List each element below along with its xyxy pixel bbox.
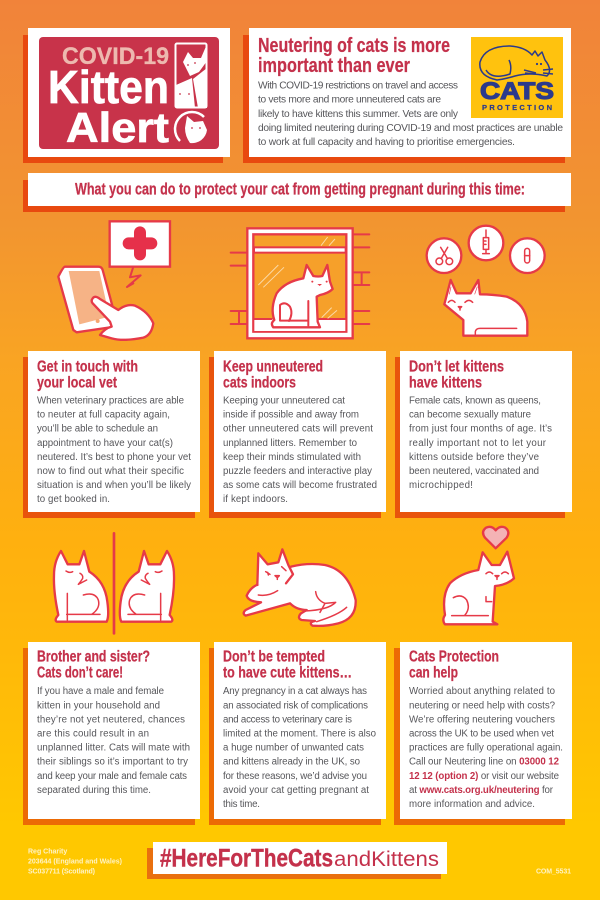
body text	[223, 686, 376, 810]
icon: heart	[483, 527, 508, 548]
body text	[37, 686, 190, 796]
logo text: Alert: Alert	[66, 104, 169, 151]
text block: intro: to vets more and more unneutered cats are	[258, 95, 441, 106]
heading: Keep unneutered	[223, 358, 323, 376]
banner: what you can do	[23, 173, 571, 212]
text block: intro	[258, 80, 563, 148]
body text: practices are fully operational again.	[409, 743, 563, 754]
icon: kitten in a circle	[175, 112, 207, 143]
body text: keep their minds stimulated with	[223, 452, 361, 463]
body text: 12 12 (option 2) or visit our website	[409, 771, 559, 782]
illustration: smiling cat	[444, 280, 527, 336]
footer: charity registration: Reg Charity	[28, 848, 67, 855]
heading	[223, 358, 323, 392]
heading: Neutering of cats is more important than ever: Neutering of cats is more	[258, 35, 450, 57]
body text: are this could result in an	[37, 728, 149, 740]
heading: Get in touch with	[37, 358, 138, 376]
heading: cats indoors	[223, 374, 296, 392]
body text: puzzle feeders and interactive play	[223, 466, 372, 477]
logo text: COVID-19: COVID-19	[62, 43, 169, 70]
body text: for these reasons, we’d advise you	[223, 771, 367, 782]
heading: Cats don’t care!	[37, 664, 123, 682]
heading: Brother and sister?	[37, 648, 150, 666]
heading: have kittens	[409, 374, 482, 392]
hashtag bold text: #HereForTheCats	[160, 844, 333, 872]
logo text: PROTECTION: PROTECTION	[482, 103, 552, 112]
heading: Cats Protection	[409, 648, 499, 666]
icon: cat with scissors, syringe and pill	[427, 226, 545, 336]
panel: Neutering intro	[243, 28, 571, 163]
body text: to get booked in.	[37, 494, 110, 505]
panel: Keep unneutered cats indoors	[209, 351, 386, 518]
body text: now to find out what their specific	[37, 466, 184, 477]
body text: been neutered, vaccinated and	[409, 466, 539, 477]
text block: intro: to work at full capacity and having to prioritise emergencies.	[258, 137, 515, 148]
icon: cat in a window	[231, 228, 369, 338]
body text: as some cats will become frustrated	[223, 480, 377, 491]
body text: Worried about anything related to	[409, 686, 555, 697]
text block: intro: likely to have kittens this summer. Vets are only	[258, 109, 459, 120]
panel: Kitten Alert logo	[23, 28, 230, 163]
body text: Call our Neutering line on 03000 12	[409, 757, 559, 768]
body text: across the UK to be used when vet	[409, 728, 554, 740]
heading: Neutering of cats is more important than ever	[258, 35, 450, 77]
body text: their siblings so it’s important to try	[37, 757, 188, 768]
icon: scissors	[427, 238, 461, 273]
body text: situation is and when you’ll be likely	[37, 480, 191, 491]
body text	[37, 396, 191, 505]
heading	[37, 648, 150, 682]
illustration: cat	[443, 552, 514, 624]
body text: neutering or need help with costs?	[409, 700, 556, 711]
panel: Cats Protection can help	[394, 642, 572, 825]
body text: unplanned litter. Cats will mate with	[37, 743, 190, 754]
icon: lying cat	[244, 549, 356, 626]
body text: and access to veterinary care is	[223, 714, 352, 725]
text block: intro: doing limited neutering during COVID-19 and most practices are unable	[258, 123, 563, 134]
logo text: Kitten: Kitten	[48, 61, 169, 113]
heading: Don’t let kittens	[409, 358, 504, 376]
hashtag banner	[147, 842, 447, 879]
footer: charity registration: 203644 (England and Wales)	[28, 858, 122, 866]
panel: Don't let kittens have kittens	[395, 351, 572, 518]
body text: Any pregnancy in a cat always has	[223, 686, 367, 697]
body text: separated during this time.	[37, 785, 151, 796]
body text: to neuter at full capacity again,	[37, 410, 170, 421]
body text: microchipped!	[409, 480, 473, 491]
body text: you’ll be able to schedule an	[37, 424, 158, 435]
body text: limited at the moment. There is also	[223, 728, 376, 740]
heading: to have cute kittens…	[223, 664, 352, 682]
body text: other unneutered cats will prevent	[223, 424, 373, 435]
body text: unplanned litters. Remember to	[223, 438, 357, 449]
body text: at www.cats.org.uk/neutering for	[409, 785, 554, 796]
heading	[37, 358, 138, 392]
heading	[223, 648, 352, 682]
body text: avoid your cat getting pregnant at	[223, 785, 369, 796]
icon: kittens in a doorway	[176, 44, 207, 108]
body text: Keeping your unneutered cat	[223, 396, 345, 406]
footer: charity registration: SC037711 (Scotland)	[28, 868, 95, 876]
body text: can become sexually mature	[409, 410, 531, 421]
body text: We’re offering neutering vouchers	[409, 714, 555, 725]
heading	[409, 358, 504, 392]
heading	[409, 648, 499, 682]
body text: they’re not yet neutered, chances	[37, 714, 185, 725]
icon: syringe	[469, 226, 503, 260]
icon: brother and sister cats with divider	[54, 533, 174, 633]
illustration: left cat	[54, 551, 108, 622]
body text: and kittens already in the UK, so	[223, 757, 360, 768]
body text: from just four months of age. It’s	[409, 424, 552, 435]
heading: your local vet	[37, 374, 117, 392]
heading: Neutering of cats is more important than ever: important than ever	[258, 55, 410, 77]
body text: When veterinary practices are able	[37, 396, 184, 406]
text block: intro: With COVID-19 restrictions on travel and access	[258, 80, 458, 92]
body text: this time.	[223, 799, 260, 810]
heading: Don’t be tempted	[223, 648, 325, 666]
panel: Get in touch with your local vet	[23, 351, 200, 518]
logo: Cats Protection	[471, 37, 563, 118]
body text: and keep your male and female cats	[37, 771, 187, 782]
body text: if kept indoors.	[223, 494, 288, 505]
icon: happy cat with heart	[443, 527, 514, 624]
panel: Don't be tempted to have cute kittens	[209, 642, 386, 825]
body text: inside if possible and away from	[223, 410, 359, 421]
body text	[409, 396, 552, 491]
icon: pill	[510, 238, 545, 273]
body text: kitten in your household and	[37, 700, 160, 711]
hashtag handwritten text: andKittens	[334, 848, 439, 871]
logo text: CATS: CATS	[480, 78, 554, 105]
icon: phone and vet message	[58, 221, 170, 340]
body text: an associated risk of complications	[223, 700, 368, 711]
body text: a huge number of unwanted cats	[223, 743, 364, 754]
illustration: right cat	[120, 551, 174, 622]
body text: neutered. It’s best to phone your vet	[37, 452, 191, 463]
body text	[409, 686, 563, 810]
body text: appointment to have your cat(s)	[37, 438, 173, 449]
panel: Brother and sister? Cats don't care!	[23, 642, 200, 825]
body text: Female cats, known as queens,	[409, 396, 541, 406]
footer: charity registration	[28, 848, 122, 876]
body text	[223, 396, 377, 505]
footer: campaign code: COM_5531	[536, 868, 571, 876]
heading: can help	[409, 664, 458, 682]
body text: really important not to let your	[409, 438, 547, 449]
body text: more information and advice.	[409, 799, 535, 810]
body text: kittens outside before they’ve	[409, 452, 539, 463]
body text: If you have a male and female	[37, 686, 164, 697]
icon: sleeping cat line drawing	[480, 46, 553, 80]
